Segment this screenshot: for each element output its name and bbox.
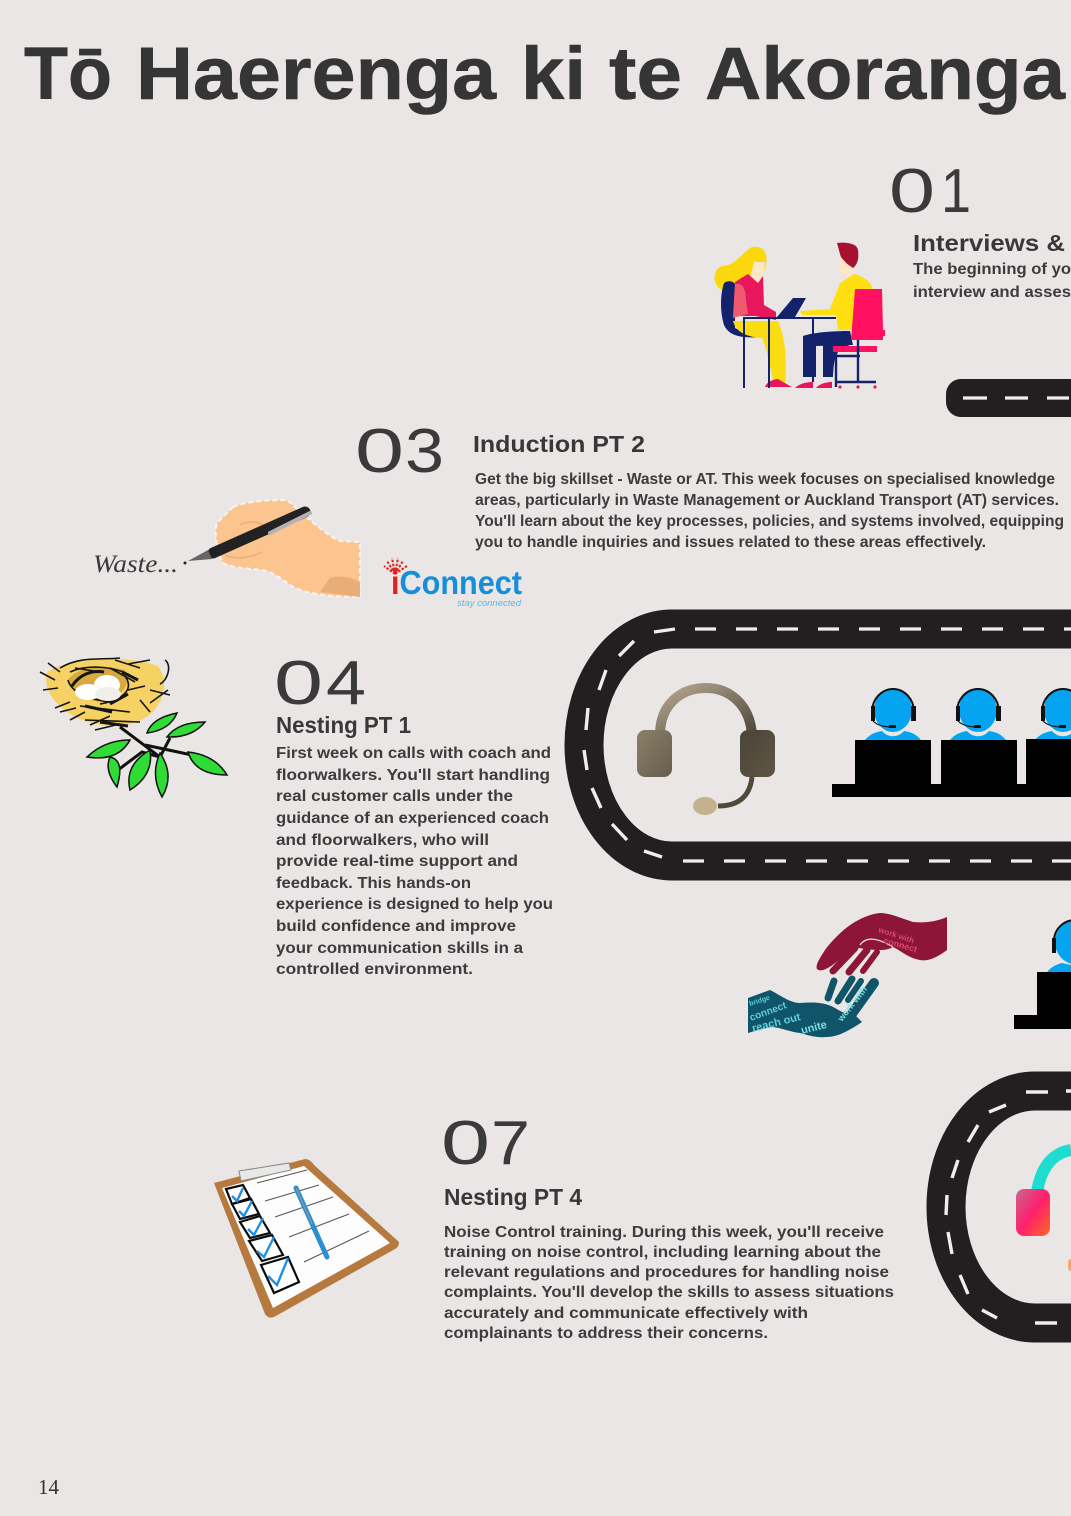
text block: step 03: You'll learn about the key processes, policies, and systems involved, equipping	[475, 513, 1064, 530]
text block: step 01: The beginning of yo	[913, 261, 1071, 278]
text block: step 04	[276, 745, 553, 978]
page number: 14	[38, 1475, 60, 1499]
teal hand: reach out	[751, 1011, 802, 1035]
step number 04: 4	[326, 649, 366, 718]
heading: interviews: Interviews &	[913, 230, 1065, 256]
icon: iConnect logo: stay connected	[457, 598, 522, 609]
icon: clipboard checklist	[214, 1159, 399, 1318]
text block: step 07: relevant regulations and procedures for handling noise	[444, 1264, 889, 1281]
agent 3	[1035, 688, 1071, 740]
red hand	[817, 913, 947, 972]
text block: step 07	[444, 1224, 894, 1342]
step number 01: 1	[941, 157, 971, 226]
text block: step 01	[913, 261, 1071, 301]
icon: colourful headset	[1016, 1150, 1071, 1271]
teal hand	[748, 979, 874, 1037]
icon: hand writing Waste: Waste...	[93, 551, 178, 578]
agent 1	[865, 688, 921, 740]
text block: step 04: real customer calls under the	[276, 788, 513, 805]
text block: step 04: First week on calls with coach and	[276, 745, 551, 762]
heading: nesting pt 4: Nesting PT 4	[444, 1184, 582, 1210]
icon: iConnect logo	[384, 558, 522, 609]
text block: step 01: interview and asses	[913, 284, 1071, 301]
step number 07: 7	[491, 1109, 530, 1178]
title: Tō	[24, 32, 112, 115]
title: te	[609, 32, 682, 115]
text block: step 04: guidance of an experienced coach	[276, 810, 549, 827]
step number 04: 0	[274, 649, 323, 718]
red hand: work with	[876, 925, 915, 945]
text block: step 03: you to handle inquiries and issues related to these areas effectively.	[475, 534, 986, 551]
road: top segment	[946, 379, 1071, 417]
teal hand: unite	[800, 1019, 828, 1037]
icon: reaching hands	[748, 913, 947, 1037]
step number 01: 0	[889, 157, 935, 226]
text block: step 07: complaints. You'll develop the skills to assess situations	[444, 1284, 894, 1301]
text block: step 03	[475, 471, 1064, 551]
text block: step 04: and floorwalkers, who will	[276, 832, 489, 849]
icon: hand writing Waste	[93, 500, 360, 597]
text block: step 04: controlled environment.	[276, 961, 473, 978]
agent 2	[950, 688, 1006, 740]
teal hand: connect	[748, 1000, 789, 1024]
icon: interview illustration	[714, 243, 885, 389]
text block: step 07: Noise Control training. During this week, you'll receive	[444, 1224, 884, 1241]
teal hand: work with	[835, 984, 869, 1024]
text block: step 03: Get the big skillset - Waste or AT. This week focuses on specialised knowledge	[475, 471, 1055, 488]
red hand: connect	[882, 935, 918, 954]
text block: step 04: build confidence and improve	[276, 918, 516, 935]
road: middle loop	[584, 629, 1071, 861]
heading: induction: Induction PT 2	[473, 431, 645, 457]
icon: grey headset	[637, 688, 775, 815]
step number 07: 0	[441, 1109, 490, 1178]
panel: step 01	[889, 157, 1071, 301]
text block: step 07: accurately and communicate effectively with	[444, 1305, 808, 1322]
text block: step 07: training on noise control, including learning about the	[444, 1244, 881, 1261]
text block: step 03: areas, particularly in Waste Management or Auckland Transport (AT) services.	[475, 492, 1059, 509]
step number 03: 0	[355, 417, 404, 486]
title	[24, 32, 1066, 115]
text block: step 04: feedback. This hands-on	[276, 875, 471, 892]
text block: step 04: floorwalkers. You'll start handling	[276, 767, 550, 784]
icon: call centre agents row	[832, 688, 1071, 797]
teal hand: bridge	[748, 995, 771, 1008]
title: Haerenga	[136, 32, 497, 115]
title: Akoranga	[705, 32, 1066, 115]
step number 03: 3	[405, 417, 444, 486]
text block: step 04: your communication skills in a	[276, 940, 523, 957]
icon: bird nest	[40, 658, 227, 797]
road: lower loop	[946, 1091, 1071, 1323]
icon: iConnect logo: iConnect	[391, 564, 522, 601]
icon: lower agent	[1014, 920, 1071, 1029]
text block: step 07: complainants to address their concerns.	[444, 1325, 768, 1342]
text block: step 04: provide real-time support and	[276, 853, 518, 870]
heading: nesting pt 1: Nesting PT 1	[276, 712, 411, 738]
title: ki	[521, 32, 586, 115]
text block: step 04: experience is designed to help you	[276, 896, 553, 913]
